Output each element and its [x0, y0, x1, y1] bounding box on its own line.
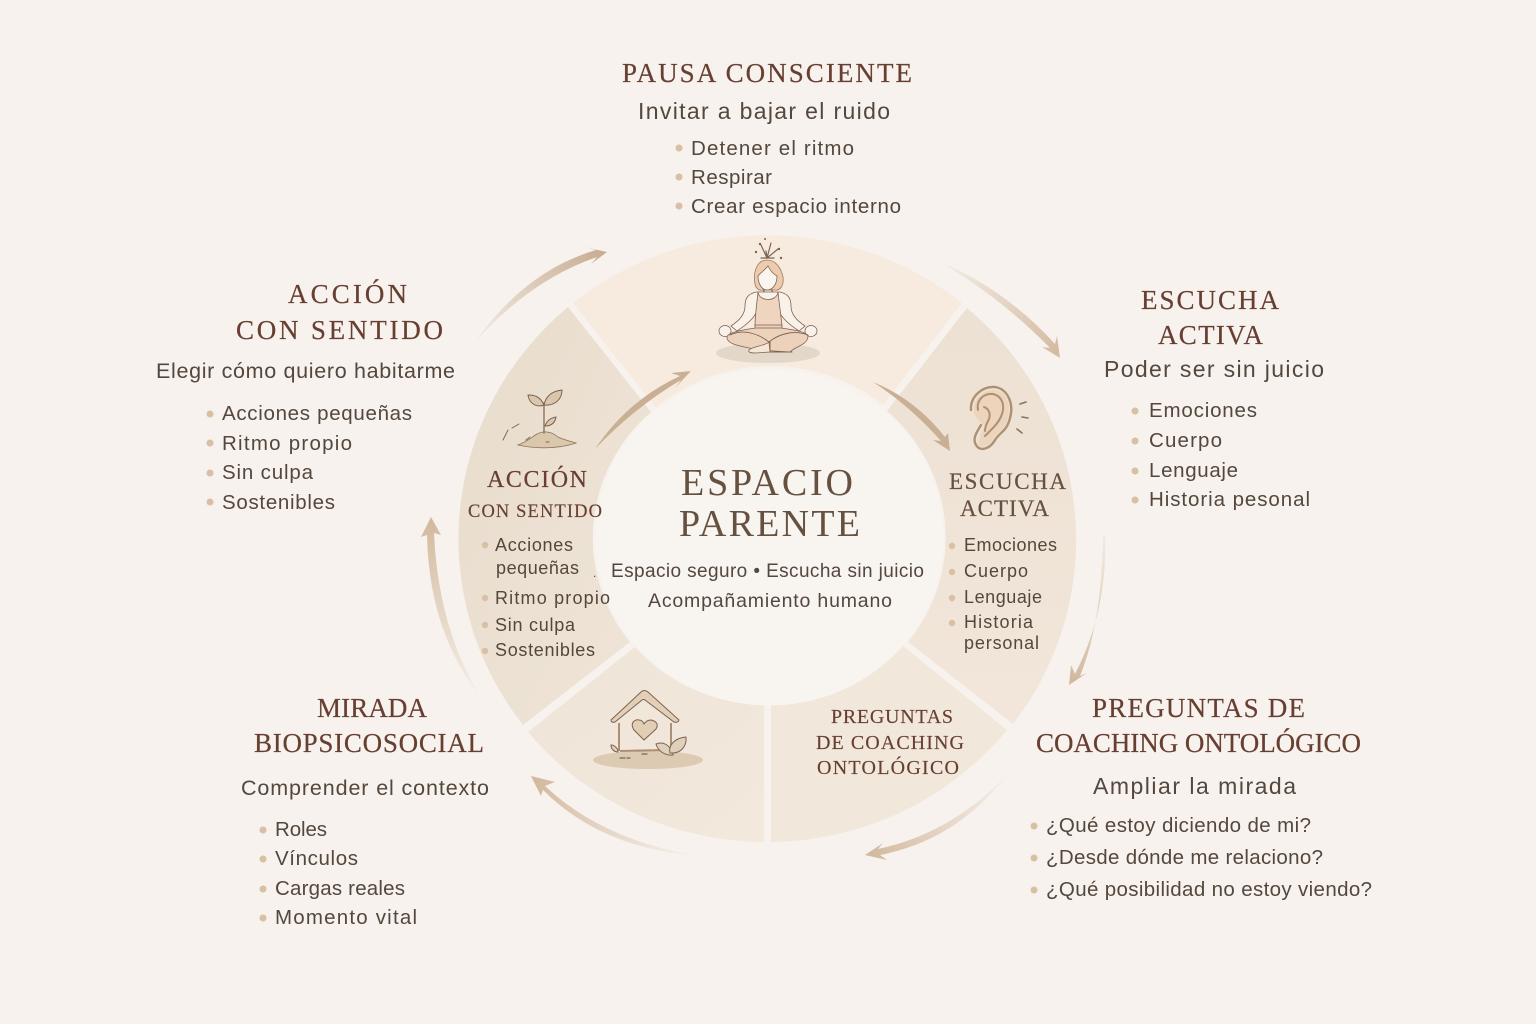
subtitle: Invitar a bajar el ruido [638, 98, 890, 124]
heading: PREGUNTAS DE [1092, 693, 1305, 723]
inner arrow: pausa to escucha [873, 382, 950, 451]
arrow: mirada to accion [421, 517, 478, 693]
heading: ESCUCHA [1141, 285, 1280, 315]
inner arrow: accion to pausa [595, 371, 691, 449]
ring text: accion con sentido: Sin culpa [495, 615, 576, 635]
arrow: mirada bottom [531, 776, 692, 855]
center text: Espacio seguro • Escucha sin juicio [611, 561, 924, 582]
text block: accion con sentido [156, 279, 455, 514]
text block: escucha activa: Historia pesonal [1149, 488, 1310, 511]
subtitle: Elegir cómo quiero habitarme [156, 359, 455, 383]
text block: mirada biopsicosocial: Vínculos [275, 847, 358, 870]
ring text: escucha activa [949, 469, 1066, 653]
text block: pausa consciente: Detener el ritmo [691, 137, 854, 160]
text block: preguntas de coaching ontologico: ¿Desde dónde me relaciono? [1046, 846, 1323, 869]
text block: accion con sentido: Acciones pequeñas [222, 402, 412, 425]
icon: sprout [503, 390, 576, 448]
ring text: accion con sentido: Sostenibles [495, 640, 595, 660]
ring text: accion con sentido: Acciones [495, 535, 573, 555]
ring text: preguntas de coaching [816, 706, 964, 779]
subtitle: Ampliar la mirada [1093, 773, 1296, 799]
ring text: accion con sentido: CON SENTIDO [468, 502, 602, 522]
icon: ear [971, 387, 1028, 449]
text block: escucha activa: Lenguaje [1149, 459, 1238, 482]
text block: escucha activa: ACTIVA [1158, 320, 1264, 350]
text block: preguntas de coaching ontologico: COACHING ONTOLÓGICO [1036, 728, 1361, 758]
text block: accion con sentido: Sostenibles [222, 491, 335, 514]
ring text: accion con sentido: pequeñas [496, 558, 579, 578]
heading: MIRADA [317, 693, 428, 723]
segment: accion con sentido [459, 307, 651, 725]
text block: mirada biopsicosocial: Roles [275, 818, 327, 841]
segment: pausa consciente [573, 235, 962, 408]
heading: PAUSA CONSCIENTE [622, 58, 912, 88]
center circle [596, 370, 944, 706]
text block: pausa consciente: Respirar [691, 166, 772, 189]
text block: accion con sentido: CON SENTIDO [236, 315, 443, 345]
ring text: accion con sentido: Ritmo propio [495, 588, 610, 608]
ring text: escucha activa: ESCUCHA [949, 469, 1066, 494]
ring text: escucha activa: Lenguaje [964, 587, 1042, 607]
arrow: pausa to escucha outer [940, 262, 1060, 358]
arrow: accion to pausa outer [475, 247, 607, 342]
text block: preguntas de coaching ontologico [1030, 693, 1372, 901]
ring text: escucha activa: Cuerpo [964, 561, 1028, 581]
text block: pausa consciente: Crear espacio interno [691, 195, 901, 218]
arrow: escucha to preguntas [1069, 535, 1105, 685]
segment: preguntas de coaching [771, 646, 1007, 842]
center text: Acompañamiento humano [648, 590, 892, 612]
ring text: accion con sentido: ACCIÓN [487, 466, 587, 493]
text block: mirada biopsicosocial: Momento vital [275, 906, 417, 929]
center text: ESPACIO [681, 462, 853, 504]
text block: preguntas de coaching ontologico: ¿Qué estoy diciendo de mi? [1046, 814, 1311, 837]
subtitle: Comprender el contexto [241, 776, 489, 800]
ring text: accion con sentido [468, 466, 610, 660]
text block: mirada biopsicosocial [241, 693, 489, 929]
center text: PARENTE [679, 503, 860, 545]
ring text: preguntas de coaching: PREGUNTAS [831, 706, 953, 728]
center text: . [593, 566, 596, 580]
ring text: escucha activa: ACTIVA [960, 496, 1049, 521]
arrow: preguntas to mirada [865, 775, 1007, 860]
text block: preguntas de coaching ontologico: ¿Qué posibilidad no estoy viendo? [1046, 878, 1372, 901]
segment: mirada biopsicosocial [528, 647, 764, 842]
icon: house with heart [593, 690, 703, 769]
ring diagram [459, 235, 1076, 842]
text block: escucha activa: Cuerpo [1149, 429, 1222, 452]
text block: escucha activa: Emociones [1149, 399, 1257, 422]
ring text: preguntas de coaching: ONTOLÓGICO [817, 755, 959, 779]
text block: mirada biopsicosocial: Cargas reales [275, 877, 405, 900]
ring text: escucha activa: personal [964, 633, 1039, 653]
segment: escucha activa [887, 308, 1076, 724]
text block: escucha activa [1104, 285, 1324, 511]
text block: pausa consciente [622, 58, 912, 218]
text block: mirada biopsicosocial: BIOPSICOSOCIAL [254, 728, 484, 758]
icon: meditating person [716, 238, 820, 363]
center text [593, 462, 924, 612]
text block: accion con sentido: Ritmo propio [222, 432, 352, 455]
ring text: preguntas de coaching: DE COACHING [816, 732, 964, 754]
text block: accion con sentido: Sin culpa [222, 461, 314, 484]
ring text: escucha activa: Emociones [964, 535, 1057, 555]
ring text: escucha activa: Historia [964, 612, 1034, 632]
subtitle: Poder ser sin juicio [1104, 356, 1324, 382]
heading: ACCIÓN [288, 279, 407, 309]
